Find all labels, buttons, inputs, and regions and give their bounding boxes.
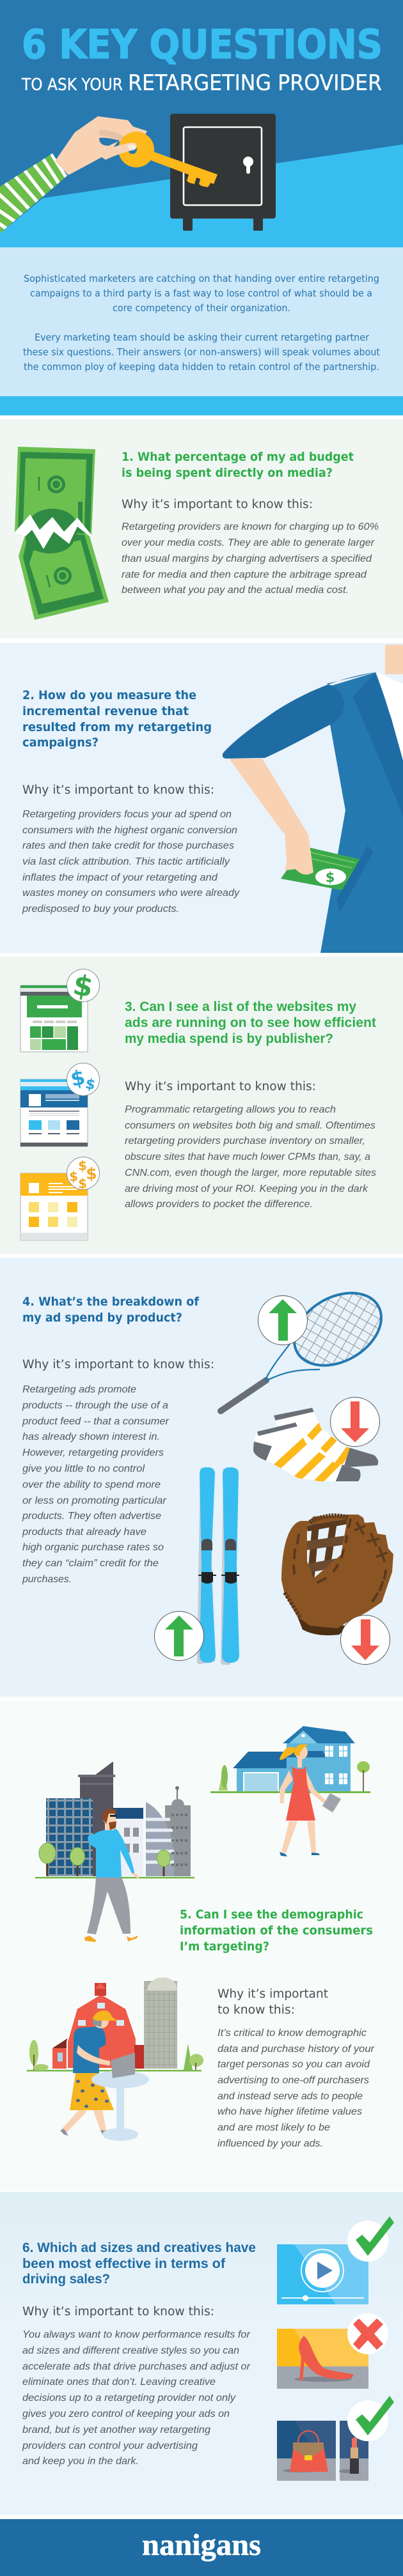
question heading: [180, 1908, 373, 1954]
icon: safe: [170, 114, 276, 231]
body text: decisions up to a retargeting provider not only: [22, 2393, 236, 2403]
icon: hand and key: [55, 116, 217, 187]
body text: [22, 809, 240, 914]
question heading: information of the consumers: [180, 1924, 373, 1938]
intro paragraph two: Every marketing team should be asking their current retargeting partner: [35, 332, 370, 343]
intro paragraph two: the common ploy of keeping data hidden to retain control of the partnership.: [24, 361, 379, 373]
panel: question 5: [0, 1701, 403, 2191]
subheading: to know this:: [217, 2003, 295, 2017]
icon: yellow website: [20, 1157, 100, 1240]
illustration: man pocketing money: [223, 645, 403, 953]
body text: Programmatic retargeting allows you to reach: [125, 1104, 336, 1115]
body text: data and purchase history of your: [217, 2044, 375, 2055]
body text: [217, 2028, 375, 2149]
body text: purchases.: [22, 1574, 72, 1585]
panel: question 2: [0, 643, 403, 953]
body text: influenced by your ads.: [217, 2138, 323, 2149]
panel: question 4: [0, 1258, 403, 1697]
body text: Retargeting providers are known for charging up to 60%: [122, 521, 379, 532]
question heading: resulted from my retargeting: [22, 720, 212, 734]
icon: blue website: $: [68, 1065, 87, 1091]
body text: eliminate ones that don’t. Leaving creative: [22, 2377, 216, 2387]
question heading: [125, 999, 376, 1046]
body text: and keep you in the dark.: [22, 2456, 139, 2467]
panel: question 3: [0, 957, 403, 1254]
body text: You always want to know performance results for: [22, 2329, 251, 2340]
question heading: [122, 450, 354, 480]
body text: [22, 1384, 170, 1585]
illustration: barn and woman: [27, 1977, 203, 2141]
question heading: [22, 688, 212, 750]
body text: rates and then take credit for those purchases: [22, 840, 234, 851]
body text: give you little to no control: [22, 1463, 145, 1474]
body text: It’s critical to know demographic: [217, 2028, 367, 2039]
body text: advertising to one-off purchasers: [217, 2075, 369, 2086]
question heading: 3. Can I see a list of the websites my: [125, 999, 356, 1014]
question heading: my ad spend by product?: [22, 1311, 182, 1325]
body text: has already shown interest in.: [22, 1431, 160, 1442]
icon: striped socks: [252, 1397, 384, 1486]
body text: or less on promoting particular: [22, 1495, 167, 1506]
illustration: house and woman: [210, 1726, 370, 1856]
question heading: been most effective in terms of: [22, 2256, 226, 2271]
body text: over the ability to spend more: [22, 1479, 161, 1490]
icon: baseball glove: [281, 1515, 393, 1664]
body text: products -- through the use of a: [22, 1400, 168, 1411]
body text: over your media costs. They are able to generate larger: [122, 537, 375, 548]
body text: inflates the impact of your retargeting and: [22, 872, 218, 883]
panel: intro: [0, 247, 403, 396]
panel: question 1: [0, 419, 403, 638]
subtitle: TO ASK YOUR: [21, 75, 123, 95]
icon: skis: [155, 1467, 239, 1665]
body text: However, retargeting providers: [22, 1447, 164, 1458]
panel: header: [0, 0, 403, 247]
body text: CNN.com, even though the larger, more reputable sites: [125, 1168, 376, 1178]
subheading: Why it’s important to know this:: [22, 2305, 214, 2318]
icon: yellow website: $: [69, 1169, 78, 1184]
subheading: Why it’s important: [217, 1987, 328, 2001]
subtitle: RETARGETING PROVIDER: [128, 70, 382, 96]
subheading: Why it’s important to know this:: [125, 1080, 316, 1093]
illustration: man pocketing money: $: [326, 870, 335, 885]
question heading: campaigns?: [22, 736, 99, 750]
body text: gives you zero control of keeping your ads on: [22, 2409, 230, 2419]
body text: consumers with the highest organic conversion: [22, 825, 237, 836]
question heading: 5. Can I see the demographic: [180, 1908, 363, 1922]
body text: retargeting providers purchase inventory on smaller,: [125, 1136, 365, 1146]
icon: torn dollar bill: [15, 447, 109, 620]
body text: product feed -- that a consumer: [22, 1416, 170, 1427]
icon: yellow website: $: [78, 1158, 87, 1173]
icon: video ad with check: [277, 2216, 394, 2304]
intro paragraph two: [23, 332, 380, 373]
body text: accelerate ads that drive purchases and adjust or: [22, 2361, 251, 2372]
icon: striped sleeve: [0, 153, 67, 233]
body text: predisposed to buy your products.: [22, 904, 179, 914]
question heading: I’m targeting?: [180, 1940, 269, 1954]
body text: [122, 521, 379, 596]
body text: [125, 1104, 376, 1210]
question heading: 6. Which ad sizes and creatives have: [22, 2241, 256, 2255]
body text: who have higher lifetime values: [217, 2106, 362, 2117]
question heading: 1. What percentage of my ad budget: [122, 450, 354, 464]
body text: allows providers to pocket the difference.: [125, 1199, 313, 1210]
subtitle: [21, 70, 382, 96]
body text: wastes money on consumers who were already: [22, 888, 240, 899]
body text: obscure sites that have much lower CPMs than, say, a: [125, 1152, 370, 1162]
icon: yellow website: $: [86, 1164, 97, 1183]
icon: shoe ad with cross: [277, 2313, 388, 2389]
intro paragraph one: [24, 273, 379, 314]
intro paragraph one: campaigns to a third party is a fast way to lose control of what should be a: [30, 288, 372, 299]
body text: and are most likely to be: [217, 2122, 330, 2133]
question heading: 4. What’s the breakdown of: [22, 1295, 200, 1309]
body text: via last click attribution. This tactic artificially: [22, 856, 230, 867]
body text: target personas so you can avoid: [217, 2059, 370, 2070]
question heading: ads are running on to see how efficient: [125, 1015, 376, 1030]
intro paragraph two: these six questions. Their answers (or non-answers) will speak volumes about: [23, 346, 380, 358]
question heading: [22, 2241, 256, 2287]
question heading: my media spend is by publisher?: [125, 1031, 333, 1046]
icon: tennis racket: [221, 1278, 394, 1411]
body text: ad sizes and different creative styles so you can: [22, 2345, 239, 2356]
icon: green website: $: [70, 969, 95, 1004]
question heading: [22, 1295, 200, 1325]
body text: consumers on websites both big and small. Oftentimes: [125, 1120, 375, 1131]
body text: than usual margins by charging advertisers a specified: [122, 553, 372, 564]
illustration: city and man: [35, 1762, 194, 1942]
icon: bag and lipstick ad with check: [277, 2396, 394, 2481]
body text: products that already have: [22, 1527, 146, 1538]
question heading: is being spent directly on media?: [122, 466, 333, 480]
intro paragraph one: Sophisticated marketers are catching on that handing over entire retargeting: [24, 273, 379, 284]
body text: brand, but is yet another way retargeting: [22, 2425, 210, 2435]
panel: question 6: [0, 2192, 403, 2515]
subheading: [217, 1987, 328, 2017]
body text: products. They often advertise: [22, 1511, 161, 1522]
body text: Retargeting providers focus your ad spend on: [22, 809, 232, 820]
panel: footer: [0, 2519, 403, 2576]
body text: are driving most of your ROI. Keeping you in the dark: [125, 1184, 368, 1194]
icon: blue website: [20, 1063, 100, 1146]
body text: providers can control your advertising: [22, 2441, 198, 2451]
question heading: incremental revenue that: [22, 704, 189, 718]
body text: they can “claim” credit for the: [22, 1558, 159, 1569]
intro paragraph one: core competency of their organization.: [113, 302, 290, 314]
question heading: driving sales?: [22, 2272, 110, 2287]
body text: [22, 2329, 251, 2467]
body text: rate for media and then capture the arbitrage spread: [122, 569, 367, 580]
body text: Retargeting ads promote: [22, 1384, 136, 1395]
body text: between what you pay and the actual media cost.: [122, 585, 349, 596]
subheading: Why it’s important to know this:: [22, 1358, 214, 1371]
icon: blue website: $: [84, 1076, 97, 1093]
icon: green website: [20, 969, 100, 1052]
icon: yellow website: $: [78, 1176, 87, 1191]
subheading: Why it’s important to know this:: [22, 783, 214, 797]
subheading: Why it’s important to know this:: [122, 498, 313, 511]
question heading: 2. How do you measure the: [22, 688, 196, 702]
logo: nanigans: nanigans: [142, 2528, 261, 2562]
body text: and instead serve ads to people: [217, 2091, 363, 2102]
body text: high organic purchase rates so: [22, 1542, 164, 1553]
